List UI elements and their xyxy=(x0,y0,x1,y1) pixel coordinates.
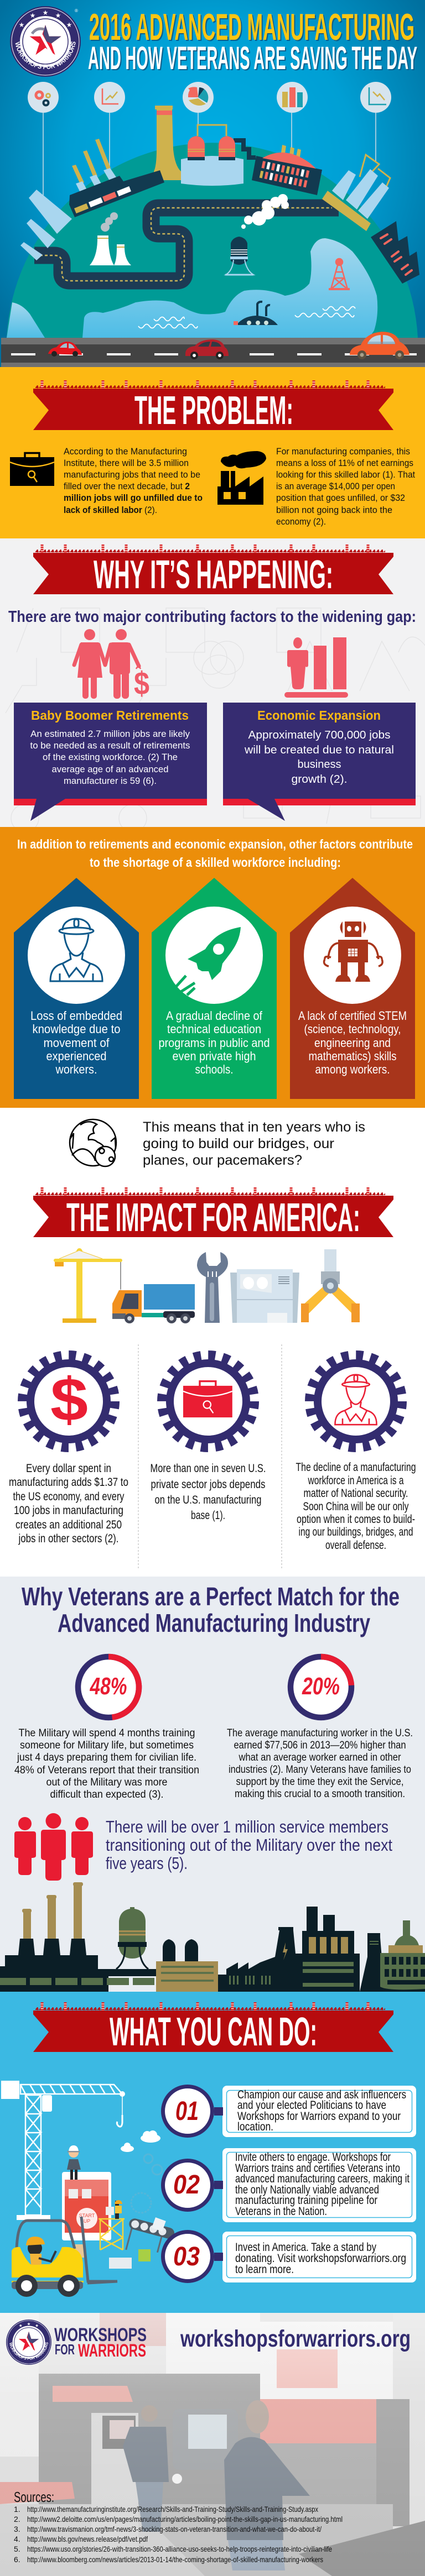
icon: robot xyxy=(324,922,382,982)
step 3: Invest in America. Take a stand by xyxy=(235,2241,376,2254)
panel: why veterans xyxy=(0,1577,425,1992)
banner: the problem xyxy=(33,380,393,433)
card: baby boomer retirements xyxy=(14,703,207,821)
card: economic expansion: business xyxy=(298,758,341,771)
step 3: to learn more. xyxy=(235,2263,294,2276)
card: technical education: A gradual decline of xyxy=(166,1009,263,1023)
text: who will build: going to build our bridges, our xyxy=(143,1136,334,1151)
globe xyxy=(7,143,418,338)
text: average worker xyxy=(227,1727,413,1800)
card: embedded knowledge xyxy=(14,878,139,1099)
card: baby boomer retirements: of the existing workforce. (2) The xyxy=(43,752,178,762)
text: one in seven xyxy=(151,1462,266,1522)
icon: crane xyxy=(54,1248,122,1323)
panel: other factors xyxy=(0,827,425,1108)
far right dark factory xyxy=(371,221,419,284)
text: who will build: planes, our pacemakers? xyxy=(143,1153,302,1168)
icon: retired couple: $ xyxy=(134,666,149,701)
red tower xyxy=(329,259,350,289)
text: problem left: lack of skilled labor (2). xyxy=(64,505,157,515)
panel: what you can do xyxy=(0,1992,425,2313)
sources: 4. xyxy=(14,2535,20,2543)
registered mark: ® xyxy=(75,8,78,13)
donut: 20%: 20% xyxy=(302,1673,340,1700)
icon: factory xyxy=(217,451,266,505)
text: national security: overall defense. xyxy=(325,1539,386,1552)
text: who will build xyxy=(143,1119,365,1168)
donut: 48%: 48% xyxy=(90,1673,127,1700)
right red building xyxy=(252,145,322,195)
card: baby boomer retirements: Baby Boomer Retirements xyxy=(31,708,189,722)
panel: hero xyxy=(0,0,425,367)
text: problem left: filled over the next decade, but 2 xyxy=(64,481,190,491)
text: problem left: million jobs will go unfilled due to xyxy=(64,493,203,503)
logo: footer: ★ xyxy=(35,2323,39,2328)
logo: footer: WORKSHOPS FOR WARRIORS xyxy=(9,2342,48,2360)
photo: worker right xyxy=(224,2400,310,2570)
sources: 5. xyxy=(14,2544,20,2553)
icon bubbles xyxy=(28,82,391,197)
text: military training: someone for Military life, but sometimes xyxy=(20,1740,194,1751)
card: STEM skills xyxy=(290,878,415,1099)
donut: 48% xyxy=(78,1657,139,1718)
logo: Workshops for Warriors: ★ xyxy=(19,21,24,29)
gear: worker xyxy=(310,1355,402,1447)
icon: rocket xyxy=(176,927,241,995)
logo: Workshops for Warriors: ★ xyxy=(66,21,72,29)
logo: footer xyxy=(6,2320,51,2365)
silo xyxy=(225,237,253,275)
text: who will build: This means that in ten years who is xyxy=(143,1119,365,1135)
card: embedded knowledge: experienced xyxy=(46,1049,106,1063)
icon: faint gears xyxy=(131,2154,162,2213)
text: every dollar xyxy=(9,1462,128,1545)
icon: tablet: START xyxy=(79,2213,95,2218)
cooling towers left xyxy=(20,190,72,260)
photo: worker left xyxy=(123,2405,169,2532)
step 3 xyxy=(163,2232,416,2282)
skyline xyxy=(0,1882,425,1992)
card: baby boomer retirements: An estimated 2.7 million jobs are likely xyxy=(30,729,190,739)
step 1: and your elected Politicians to have xyxy=(237,2099,386,2112)
icon: retired couple xyxy=(74,629,149,701)
card: embedded knowledge: knowledge due to xyxy=(32,1022,121,1036)
orange car xyxy=(350,332,410,359)
card: baby boomer retirements: manufacturer is 59 (6). xyxy=(64,776,157,786)
text: every dollar: 100 jobs in manufacturing xyxy=(14,1504,123,1517)
banner: what you can do xyxy=(33,2002,393,2054)
white smoke xyxy=(241,194,289,229)
heading: why veterans xyxy=(22,1582,400,1637)
step 3: 03 xyxy=(173,2242,200,2271)
step 2: 02 xyxy=(173,2170,200,2200)
heading: other factors: to the shortage of a skilled workforce including: xyxy=(90,855,341,870)
red car xyxy=(48,342,82,357)
panel: why it's happening xyxy=(0,538,425,832)
heading: other factors xyxy=(17,837,413,870)
gear: dollar xyxy=(23,1355,115,1447)
card: baby boomer retirements: average age of an advanced xyxy=(52,764,168,774)
wordmark: WORKSHOPS xyxy=(54,2324,147,2345)
icon: worker xyxy=(50,919,102,981)
panel: footer photo xyxy=(0,2313,425,2576)
logo: Workshops for Warriors: ★ xyxy=(30,12,35,19)
card: technical education: schools. xyxy=(195,1062,234,1076)
left factory xyxy=(69,139,164,217)
logo: Workshops for Warriors: WORKSHOPS FOR WARRIORS xyxy=(15,41,75,69)
maroon car xyxy=(185,339,229,359)
card: technical education xyxy=(152,878,277,1099)
icon: briefcase xyxy=(10,453,54,486)
card: economic expansion: will be created due to natural xyxy=(244,744,394,756)
card: technical education: programs in public and xyxy=(158,1036,270,1050)
central tank with domes xyxy=(181,125,256,186)
text: problem right: economy (2). xyxy=(276,516,326,527)
logo: Workshops for Warriors: ★ xyxy=(55,12,61,19)
icon: forklift xyxy=(12,2217,117,2297)
text: problem right: means a loss of 11% of net earnings xyxy=(276,458,413,468)
text: problem right: is an average $14,000 per open xyxy=(276,481,395,491)
photo: console xyxy=(91,2409,238,2551)
text: one in seven: on the U.S. manufacturing xyxy=(155,1494,261,1506)
step 2: the only Nationally viable advanced xyxy=(235,2184,379,2196)
icon: businessman with bars xyxy=(284,637,348,698)
card: embedded knowledge: workers. xyxy=(55,1062,97,1076)
dashed separators xyxy=(138,1344,282,1569)
sources: http://www.travismanion.org/tmf-news/3-shocking-stats-on-veteran-transition-and-what-we-can-do-about-it/ xyxy=(27,2525,322,2533)
text: military training: out of the Military was more xyxy=(46,1777,167,1788)
sources: https://www.uso.org/stories/26-with-transition-360-alliance-uso-seeks-to-help-troops-reintegrate-into-civilian-life xyxy=(27,2544,332,2553)
panel: the problem xyxy=(0,367,425,538)
step 2: manufacturing training pipeline for xyxy=(235,2194,377,2207)
donut: 20% xyxy=(291,1657,351,1718)
waves xyxy=(138,306,355,328)
text: military training: just 4 days preparing them for civilian life. xyxy=(17,1752,196,1763)
gear: dollar: $ xyxy=(50,1366,88,1434)
text: problem left xyxy=(64,446,203,515)
text: problem left: Institute, there will be 3.5 million xyxy=(64,458,189,468)
text: problem right: looking for this skilled labor (1). That xyxy=(276,469,415,480)
banner: why it's happening xyxy=(33,544,393,597)
right blue chimneys xyxy=(322,155,390,231)
logo: footer: ★ xyxy=(27,2321,31,2326)
nuclear towers xyxy=(90,235,131,265)
text: every dollar: manufacturing adds $1.37 to xyxy=(9,1476,128,1489)
card: technical education: even private high xyxy=(173,1049,256,1063)
icon: robotic claw xyxy=(301,1249,360,1322)
text: problem left: According to the Manufacturing xyxy=(64,446,187,457)
wordmark xyxy=(54,2324,147,2360)
text: problem right xyxy=(276,446,415,527)
card: STEM skills: engineering and xyxy=(314,1036,391,1050)
text: average worker: what an average worker earned in other xyxy=(239,1752,401,1763)
icon: boxes xyxy=(74,2217,166,2269)
text: problem right: billion not going back into the xyxy=(276,505,392,515)
text: military training: The Military will spend 4 months training xyxy=(19,1727,195,1739)
sources: http://www.bloomberg.com/news/articles/2013-01-14/the-coming-shortage-of-skilled-manufacturing-workers xyxy=(27,2555,323,2564)
step 1: location. xyxy=(237,2121,273,2133)
wordmark: WARRIORS xyxy=(78,2341,146,2360)
tall chimney xyxy=(154,106,181,180)
text: average worker: making this crucial to a smooth transition. xyxy=(235,1788,405,1800)
title xyxy=(88,6,417,76)
icon: wrench xyxy=(197,1252,228,1323)
panel: impact xyxy=(0,1108,425,1577)
card: baby boomer retirements: to be needed as a result of retirements xyxy=(30,740,190,751)
card: economic expansion: Economic Expansion xyxy=(257,708,381,722)
icon: tablet: UP xyxy=(84,2218,90,2224)
icon: tablet xyxy=(62,2172,111,2240)
card: embedded knowledge: movement of xyxy=(43,1036,110,1050)
text: military training xyxy=(14,1727,199,1800)
submarine xyxy=(234,302,278,325)
icon: globe and moon xyxy=(70,1119,116,1166)
card: STEM skills: A lack of certified STEM xyxy=(298,1009,407,1023)
text: one in seven: private sector jobs depends xyxy=(151,1478,266,1491)
text: one million service members: five years (5). xyxy=(106,1854,188,1873)
text: one million service members xyxy=(106,1817,392,1873)
icon: conveyor xyxy=(122,2217,175,2261)
text: every dollar: jobs in other sectors (2). xyxy=(18,1532,118,1545)
text: national security xyxy=(296,1461,416,1552)
icon: scaffold with worker xyxy=(99,2200,125,2250)
card: STEM skills: (science, technology, xyxy=(304,1022,401,1036)
text: military training: difficult than expected (3). xyxy=(50,1789,164,1800)
text: one in seven: More than one in seven U.S. xyxy=(151,1462,266,1475)
card: economic expansion: Approximately 700,000 jobs xyxy=(248,729,391,741)
text: problem right: position that goes unfilled, or $32 xyxy=(276,493,405,503)
step 1 xyxy=(163,2086,416,2137)
text: every dollar: creates an additional 250 xyxy=(15,1519,122,1531)
sources: 3. xyxy=(14,2525,20,2533)
text: problem left: manufacturing jobs that need to be xyxy=(64,469,200,480)
icon: three people xyxy=(14,1813,93,1881)
card: economic expansion xyxy=(223,703,416,821)
icon: truck xyxy=(112,1284,195,1323)
text: every dollar: Every dollar spent in xyxy=(26,1462,111,1475)
step 2 xyxy=(163,2148,416,2222)
text: problem right: For manufacturing companies, this xyxy=(276,446,410,457)
sources: http://www.themanufacturinginstitute.org/Research/Skills-and-Training-Study/Skills-and-Training-Study.aspx xyxy=(27,2505,318,2514)
logo: footer: ★ xyxy=(19,2323,23,2328)
card: economic expansion: growth (2). xyxy=(291,773,348,786)
road on globe xyxy=(34,208,339,281)
card: embedded knowledge: Loss of embedded xyxy=(30,1009,122,1023)
card: STEM skills: mathematics) skills xyxy=(309,1049,396,1063)
icon: standing worker xyxy=(67,2145,81,2180)
sources: http://www.bls.gov/news.release/pdf/vet.pdf xyxy=(27,2535,148,2543)
wordmark: FOR xyxy=(55,2341,75,2358)
text: military training: 48% of Veterans report that their transition xyxy=(14,1765,199,1776)
logo: Workshops for Warriors xyxy=(10,6,81,77)
card: STEM skills: among workers. xyxy=(315,1062,390,1076)
icon: machine xyxy=(230,1269,299,1323)
sources: http://www2.deloitte.com/us/en/pages/manufacturing/articles/boiling-point-the-skills-gap-in-us-manufacturing.html xyxy=(27,2515,343,2523)
grey smoke xyxy=(101,212,118,232)
card: technical education: technical education xyxy=(167,1022,261,1036)
sources xyxy=(14,2489,343,2564)
text: average worker: support by the time they exit the Service, xyxy=(236,1776,404,1788)
icon: clouds xyxy=(121,2130,160,2152)
text: one in seven: base (1). xyxy=(191,1509,225,1522)
logo: Workshops for Warriors: ★ xyxy=(43,9,48,17)
text: every dollar: the US economy, and every xyxy=(13,1490,125,1503)
street xyxy=(1,338,425,367)
sources: 6. xyxy=(14,2555,20,2564)
sources: 1. xyxy=(14,2505,20,2514)
gear: briefcase xyxy=(162,1355,254,1447)
sources: Sources: xyxy=(14,2489,54,2505)
sources: 2. xyxy=(14,2515,20,2523)
step 1: 01 xyxy=(175,2097,199,2126)
icon: tower crane xyxy=(1,2081,125,2220)
step 2: Veterans in the Nation. xyxy=(235,2205,327,2218)
